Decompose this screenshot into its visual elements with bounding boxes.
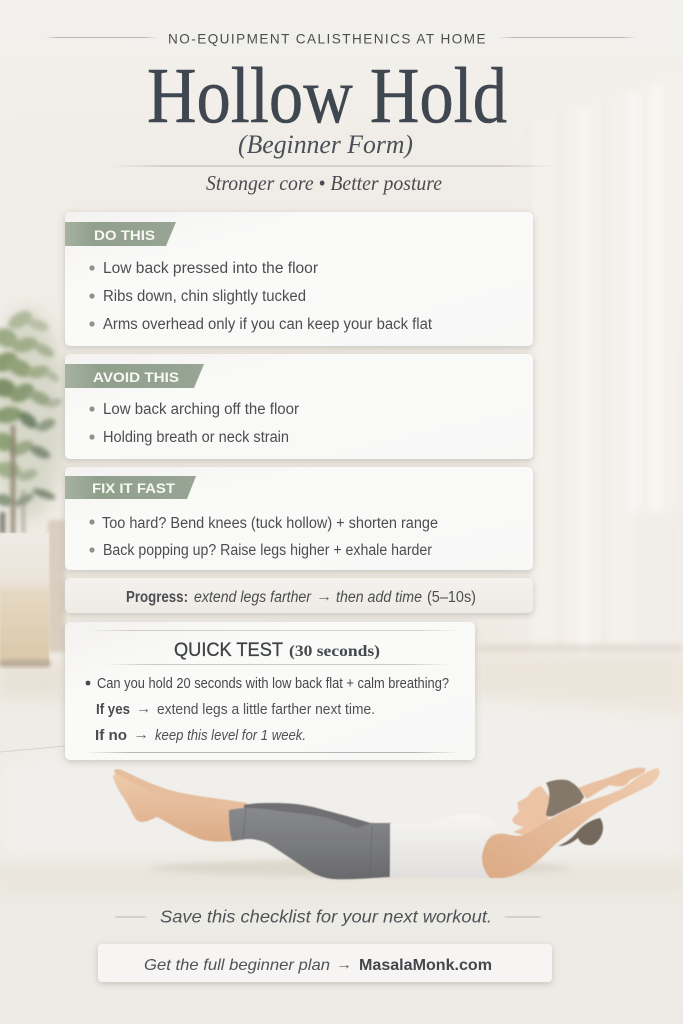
quick test question and outcomes: If yes xyxy=(96,702,130,718)
eyebrow heading with rules: NO-EQUIPMENT CALISTHENICS AT HOME xyxy=(168,30,487,46)
call to action bar: Get the full beginner plan xyxy=(144,957,330,974)
panel: do this xyxy=(65,212,533,346)
save line: Save this checklist for your next workout. xyxy=(160,906,492,926)
call to action bar: → xyxy=(336,956,352,972)
title divider and tagline: Stronger core • Better posture xyxy=(206,171,442,195)
tab: do this xyxy=(65,222,176,246)
near arm and shoulder xyxy=(482,768,660,878)
checklist: do this: Low back pressed into the floor xyxy=(103,260,318,277)
checklist: do this: Ribs down, chin slightly tucked xyxy=(103,288,306,305)
tab: fix it fast: FIX IT FAST xyxy=(92,480,175,496)
plant and pot xyxy=(0,307,66,752)
checklist: avoid this: Low back arching off the floor xyxy=(103,401,299,418)
shorts details xyxy=(243,809,372,877)
quick test heading: (30 seconds) xyxy=(289,643,380,660)
panel: fix it fast xyxy=(65,467,533,570)
near leg and foot xyxy=(113,774,233,842)
tab: do this: DO THIS xyxy=(94,227,155,243)
quick test heading: QUICK TEST xyxy=(174,640,283,661)
tab: avoid this: AVOID THIS xyxy=(93,369,179,385)
quick test question and outcomes: If no xyxy=(95,728,127,744)
call to action bar: MasalaMonk.com xyxy=(359,957,492,974)
far arm xyxy=(578,768,645,799)
quick test question and outcomes: → xyxy=(136,700,151,716)
panel: avoid this xyxy=(65,354,533,459)
progress strip: (5–10s) xyxy=(427,589,476,606)
tab: avoid this xyxy=(65,364,204,388)
checklist: do this: Arms overhead only if you can keep your back flat xyxy=(103,316,433,333)
progress strip: → xyxy=(316,588,332,604)
tab: fix it fast xyxy=(65,476,196,499)
quick test heading xyxy=(174,640,380,661)
progress strip: Progress: xyxy=(126,589,188,606)
hair xyxy=(546,780,584,816)
title: Hollow Hold xyxy=(147,53,507,140)
progress strip: extend legs farther xyxy=(194,589,312,606)
shirt xyxy=(390,814,514,878)
quick test question and outcomes: Can you hold 20 seconds with low back flat + calm breathing? xyxy=(97,676,449,692)
far shorts leg xyxy=(244,803,374,840)
progress strip xyxy=(65,578,533,613)
far leg xyxy=(114,769,247,812)
quick test question and outcomes: keep this level for 1 week. xyxy=(155,728,306,744)
checklist: avoid this: Holding breath or neck strain xyxy=(103,429,289,446)
shorts xyxy=(229,808,392,879)
checklist: fix it fast: Back popping up? Raise legs higher + exhale harder xyxy=(103,542,432,559)
panel: quick test xyxy=(65,622,475,760)
illustration: woman in hollow hold xyxy=(113,768,660,879)
checklist: do this xyxy=(89,260,433,333)
quick test question and outcomes xyxy=(86,676,449,744)
checklist: avoid this xyxy=(89,401,299,446)
call to action bar xyxy=(98,944,552,982)
progress strip: then add time xyxy=(336,589,422,606)
checklist: fix it fast: Too hard? Bend knees (tuck hollow) + shorten range xyxy=(102,515,438,532)
checklist: fix it fast xyxy=(89,515,438,559)
quick test question and outcomes: → xyxy=(133,726,149,742)
subtitle: (Beginner Form) xyxy=(238,130,413,159)
neck and face xyxy=(512,786,552,836)
quick test question and outcomes: extend legs a little farther next time. xyxy=(157,702,375,718)
ponytail and hair back xyxy=(558,818,603,846)
